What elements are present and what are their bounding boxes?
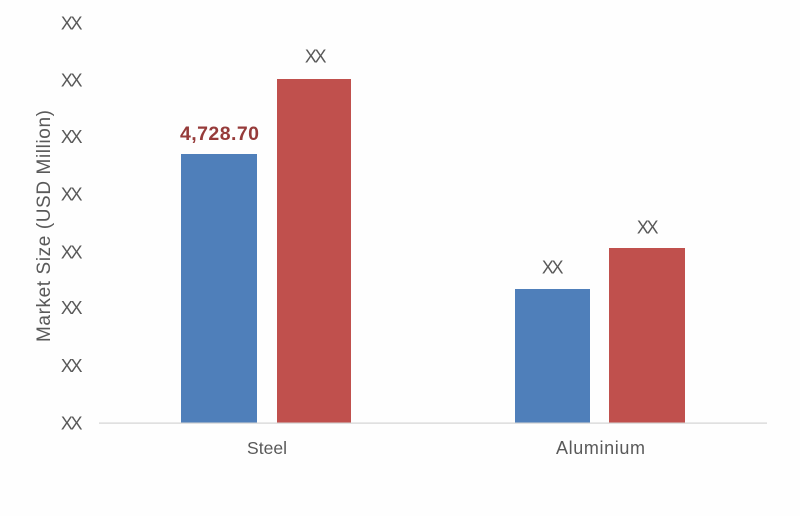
value label: 4,728.70: 4,728.70 — [180, 123, 259, 145]
group: Aluminium — [515, 218, 685, 458]
y-axis tick labels: XX — [61, 298, 82, 318]
y-axis tick labels: XX — [61, 184, 82, 204]
category label: Steel: Steel — [247, 438, 287, 458]
bar: Steel red — [277, 79, 351, 422]
value label: Aluminium red XX: XX — [637, 218, 658, 238]
y-axis tick labels: XX — [61, 414, 82, 434]
group: Steel — [180, 46, 351, 458]
y-axis tick labels — [61, 14, 82, 434]
y-axis title: Market Size (USD Million) — [34, 110, 55, 342]
y-axis tick labels: XX — [61, 70, 82, 90]
value label: Steel red XX: XX — [305, 46, 326, 66]
y-axis tick labels: XX — [61, 14, 82, 34]
x-axis line — [99, 422, 767, 424]
value label: Aluminium blue XX: XX — [542, 258, 563, 278]
category label: Aluminium: Aluminium — [556, 438, 645, 458]
bar: Steel blue — [181, 154, 257, 422]
y-axis tick labels: XX — [61, 127, 82, 147]
y-axis tick labels: XX — [61, 356, 82, 376]
bar: Aluminium blue — [515, 289, 590, 422]
bar: Aluminium red — [609, 248, 685, 422]
y-axis tick labels: XX — [61, 242, 82, 262]
